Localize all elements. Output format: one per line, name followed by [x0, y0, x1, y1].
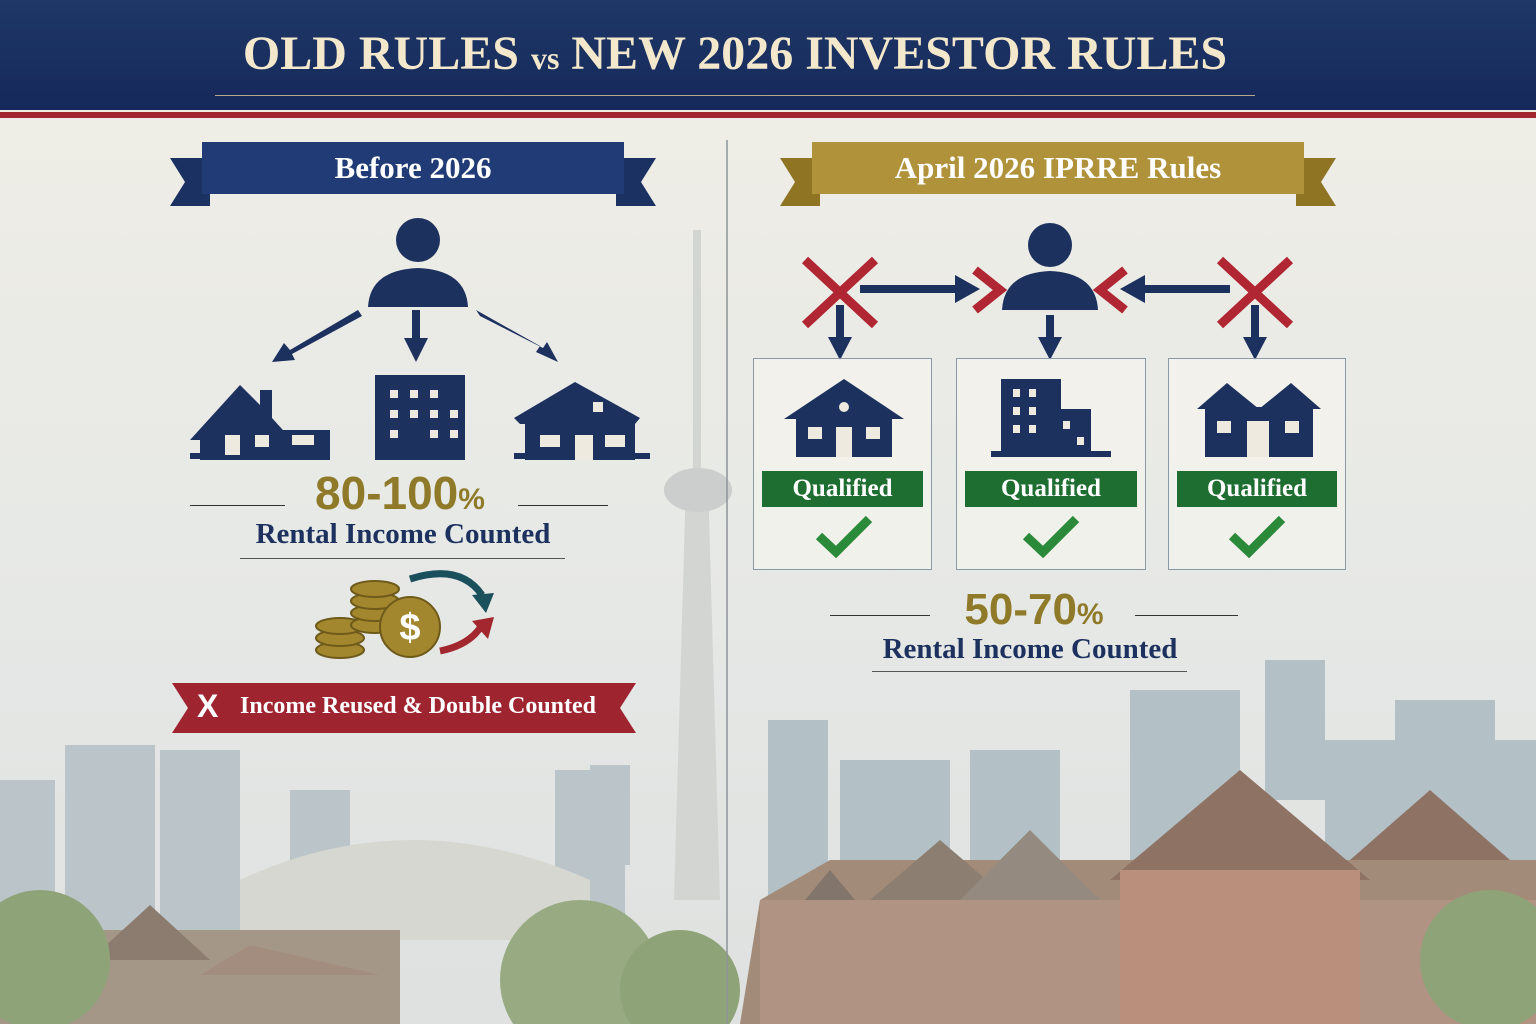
stat: 80-100%	[190, 467, 608, 559]
ribbon: Income Reused & Double Counted: X	[197, 688, 218, 724]
stat: 80-100%: 80-100%	[315, 467, 485, 519]
stat: 80-100%: Rental Income Counted	[256, 518, 550, 550]
card 3: Qualified	[1207, 475, 1307, 502]
card 2: Qualified	[1001, 475, 1101, 502]
ribbon: Before 2026: Before 2026	[335, 150, 491, 185]
title: OLD RULES vs NEW 2026 INVESTOR RULES	[243, 27, 1227, 80]
stat: 50-70%: 50-70%	[964, 585, 1104, 634]
card 3	[1168, 358, 1346, 570]
ribbon: Income Reused & Double Counted: Income Reused & Double Counted	[240, 693, 596, 719]
stat: 50-70%	[830, 585, 1238, 672]
card 1	[753, 358, 932, 570]
stat: 50-70%: Rental Income Counted	[883, 633, 1177, 665]
ribbon: April 2026 IPRRE Rules: April 2026 IPRRE Rules	[895, 150, 1221, 185]
ribbon: April 2026 IPRRE Rules	[780, 142, 1336, 206]
ribbon: Income Reused & Double Counted	[172, 683, 636, 733]
panel: qualified properties	[753, 358, 1346, 570]
icon: coins and dollar	[315, 570, 494, 659]
diagram: investor to properties (old)	[190, 218, 650, 460]
card 1: Qualified	[792, 475, 892, 502]
ribbon: Before 2026	[170, 142, 656, 206]
diagram: new rules flow	[802, 223, 1293, 360]
icon: coins and dollar: $	[399, 607, 421, 649]
card 2	[956, 358, 1146, 570]
header band	[0, 0, 1536, 110]
